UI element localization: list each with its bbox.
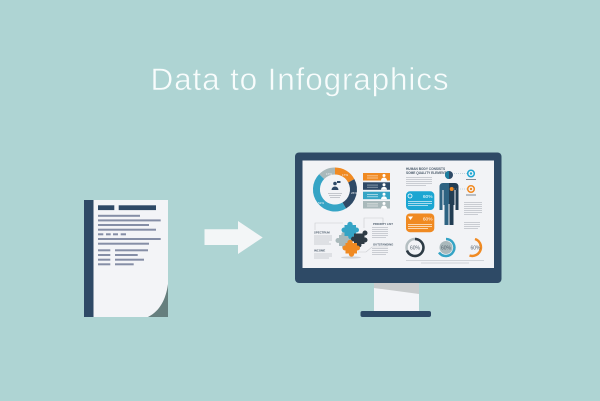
- label: outstanding: [372, 242, 393, 255]
- ribbon: dark: [363, 182, 390, 190]
- donut percentages: 52%: [318, 201, 324, 205]
- label: priority list: PRIORITY LIST: [373, 222, 393, 226]
- body heading: HUMAN BODY CONSISTS: [406, 167, 445, 171]
- blue stat card: 60%: [423, 194, 433, 200]
- monitor stand: [374, 283, 419, 311]
- label: priority list: [372, 222, 393, 238]
- monitor body: [295, 152, 502, 283]
- footer text: [406, 260, 484, 264]
- document icon: [84, 200, 168, 317]
- puzzle piece: dark: [351, 230, 368, 248]
- document text lines: [98, 215, 161, 265]
- callout connector lines: [454, 174, 467, 189]
- callout icon: orange: [466, 186, 476, 196]
- monitor screen: [302, 160, 494, 268]
- donut percentages: 26%: [351, 191, 357, 195]
- donut chart: [316, 171, 353, 208]
- orange stat card: 60%: [423, 216, 433, 222]
- puzzle piece: grey: [336, 232, 353, 249]
- gauge: dark: 60%: [410, 245, 421, 251]
- ribbon: grey: [363, 201, 390, 208]
- body heading: [406, 167, 448, 175]
- label: income: [314, 248, 332, 258]
- donut percentages: 17%: [326, 172, 332, 176]
- gauge: blue: [439, 239, 454, 256]
- body heading: SOME QUALITY ELEMENTS: [406, 171, 448, 175]
- puzzle shadow: [341, 256, 361, 259]
- label: outstanding: OUTSTANDING: [373, 242, 393, 246]
- puzzle piece: orange: [342, 240, 360, 257]
- document curled corner: [148, 284, 168, 317]
- monitor base: [360, 311, 431, 317]
- title: Data to Infographics: [151, 61, 449, 97]
- ribbon: orange: [363, 173, 390, 180]
- donut percentages: 17%: [342, 173, 348, 177]
- document spine: [84, 200, 94, 317]
- puzzle diagram: [336, 222, 368, 259]
- donut centre person icon: [332, 181, 340, 190]
- blue stat card: [406, 191, 434, 210]
- figure torso and limbs: [440, 183, 449, 225]
- puzzle piece: blue: [342, 222, 359, 239]
- orange stat card: [406, 214, 434, 232]
- figure organ marker: [450, 187, 454, 191]
- right side text: [464, 202, 482, 229]
- gauge: blue: 60%: [441, 245, 452, 251]
- donut percentages: [318, 172, 357, 205]
- screen content: [314, 167, 484, 264]
- callout icon: blue: [466, 170, 476, 180]
- label: income: INCOME: [314, 248, 325, 252]
- gauge: dark: [406, 239, 424, 256]
- human figure: [440, 171, 458, 225]
- puzzle connector lines: [315, 218, 388, 252]
- label: spectrum: [314, 230, 332, 244]
- gauge: orange: 60%: [470, 245, 481, 251]
- figure head: [445, 171, 453, 179]
- ribbon: blue: [363, 192, 390, 199]
- arrow: [204, 221, 263, 254]
- gauge: orange: [470, 239, 481, 256]
- donut centre text: [328, 193, 342, 198]
- body intro text: [406, 177, 432, 186]
- document header bars: [98, 205, 156, 210]
- label: spectrum: SPECTRUM: [314, 230, 330, 234]
